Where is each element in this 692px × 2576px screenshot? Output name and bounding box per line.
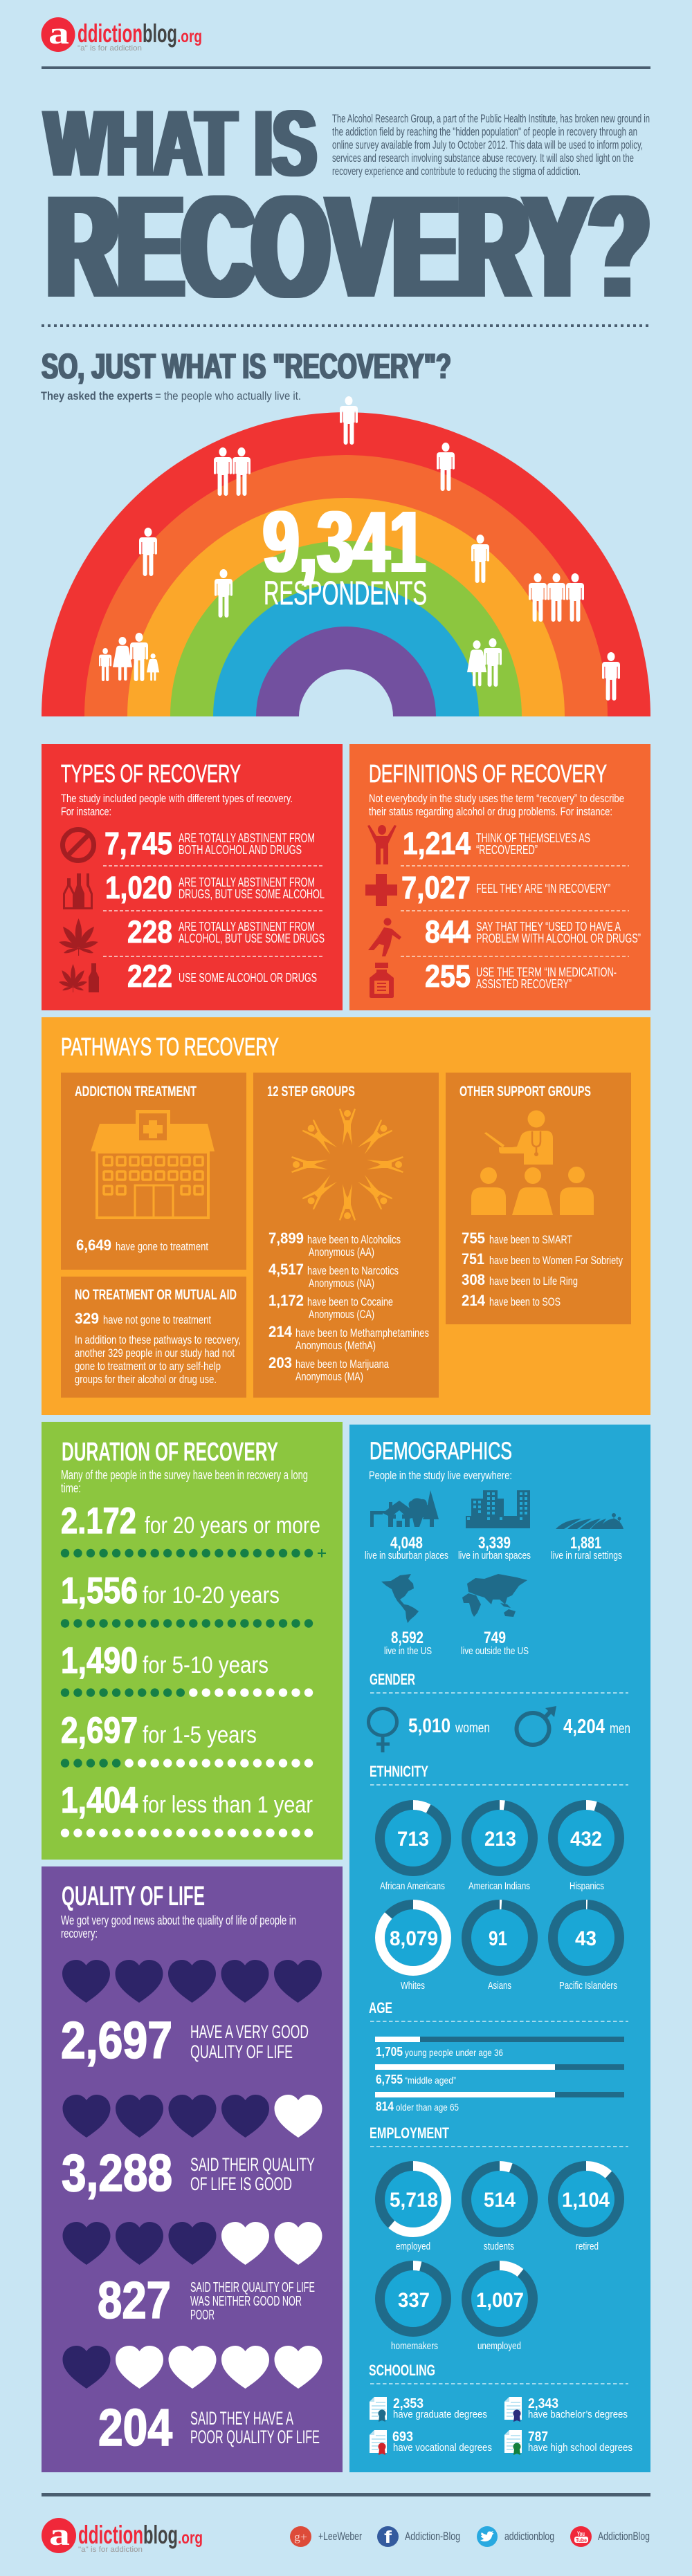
description: The study included people with different types of recovery. (61, 792, 293, 805)
stats: us vs outside: live in the US (384, 1645, 432, 1657)
hearts row 1 (62, 1960, 322, 2003)
donut: students: students (484, 2241, 514, 2252)
stats: residence types: 1,881 (570, 1534, 601, 1553)
social: youtube: AddictionBlog (598, 2530, 650, 2543)
donut: retired: retired (576, 2241, 599, 2252)
stat 844 (425, 914, 641, 949)
logo wordmark org: .org (177, 27, 202, 46)
vocational degrees: have vocational degrees (393, 2442, 492, 2454)
card heading: ADDICTION TREATMENT (75, 1084, 197, 1100)
heading: DURATION OF RECOVERY (62, 1438, 278, 1467)
logo wordmark: ddiction (78, 19, 143, 48)
rainbow band yellow (127, 498, 565, 716)
title line 1: WHAT IS (45, 91, 316, 196)
women stat: 5,010 (408, 1715, 450, 1737)
heading: DEMOGRAPHICS (370, 1438, 512, 1465)
donut: asians (466, 1905, 533, 1992)
social: facebook: f (384, 2528, 392, 2547)
hearts row 2 (62, 2095, 322, 2138)
list: 12 step stats: 7,899 (268, 1230, 304, 1247)
panel: definitions of recovery (349, 744, 650, 1010)
stat 222 (127, 958, 317, 994)
logo letter: a (49, 2517, 70, 2552)
heading: TYPES OF RECOVERY (61, 759, 241, 788)
stats: residence types: 3,339 (478, 1534, 511, 1553)
high school degrees: 787 (528, 2429, 548, 2445)
stat 2,697 (61, 2011, 309, 2069)
donut: whites (380, 1905, 446, 1992)
icon: medical cross (365, 874, 397, 906)
heading: PATHWAYS TO RECOVERY (61, 1032, 279, 1061)
rainbow chart (42, 396, 650, 716)
stats: residence types: live in suburban places (365, 1550, 448, 1562)
list: 12 step stats: Anonymous (CA) (309, 1308, 374, 1321)
logo wordmark blog: blog (143, 2521, 178, 2549)
social: facebook (377, 2526, 460, 2547)
stat 255: 255 (425, 958, 471, 994)
social: google plus: g+ (294, 2530, 307, 2543)
icon: city (466, 1490, 530, 1528)
stat 204 (98, 2398, 320, 2456)
list: other support stats: 308 (462, 1271, 485, 1288)
donut: whites: 8,079 (390, 1927, 438, 1950)
intro paragraph: recovery experience and contribute to reducing the stigma of addiction. (332, 165, 581, 178)
list: other support stats (462, 1230, 623, 1309)
donut: homemakers: 337 (398, 2289, 430, 2312)
donut: employed: employed (396, 2241, 430, 2252)
card: 12 step groups (253, 1073, 439, 1398)
hearts row 3 (62, 2222, 322, 2265)
rainbow band green (170, 541, 522, 716)
donut: american indians: American Indians (468, 1880, 530, 1892)
panel: demographics (349, 1425, 650, 2472)
list: 12 step stats: 214 (268, 1323, 293, 1340)
women stat (408, 1715, 490, 1737)
donut: unemployed: unemployed (477, 2340, 521, 2352)
social: youtube: Tube (576, 2537, 587, 2543)
stat 2,697: 2,697 (61, 2011, 172, 2069)
icon: rural fields (556, 1513, 623, 1529)
rainbow band red (42, 412, 650, 716)
icon: female symbol (368, 1708, 397, 1752)
stat 222: USE SOME ALCOHOL OR DRUGS (179, 971, 317, 985)
stat: 10-20 years: for 10-20 years (143, 1582, 280, 1609)
footer logo (42, 2517, 203, 2554)
donut: pacific islanders (553, 1905, 619, 1992)
stat: less than 1 year (61, 1780, 313, 1821)
donut: students (466, 2166, 533, 2252)
bar: under 36 (375, 2037, 624, 2059)
donut: retired: 1,104 (562, 2189, 610, 2212)
donut: unemployed (466, 2265, 533, 2352)
people icons (99, 396, 620, 701)
card heading: OTHER SUPPORT GROUPS (459, 1084, 591, 1100)
list: 12 step stats: Anonymous (MA) (295, 1370, 363, 1383)
stat 2,697: QUALITY OF LIFE (190, 2041, 293, 2062)
stat 222: 222 (127, 958, 172, 994)
panel: types of recovery (42, 744, 343, 1010)
bar: under 36: 1,705 (376, 2045, 403, 2059)
stat: gone to treatment: have gone to treatment (116, 1240, 208, 1253)
stat 827 (98, 2271, 315, 2329)
stat 228: ALCOHOL, BUT USE SOME DRUGS (179, 932, 325, 945)
list: 12 step stats: Anonymous (MethA) (295, 1339, 376, 1352)
stats: residence types: 4,048 (390, 1534, 423, 1553)
stat 255: ASSISTED RECOVERY” (476, 977, 572, 991)
list: 12 step stats: have been to Methamphetamines (295, 1326, 429, 1340)
stats: us vs outside: 8,592 (391, 1629, 424, 1647)
dots row 2 (61, 1619, 313, 1628)
heading: QUALITY OF LIFE (62, 1881, 205, 1911)
panel: pathways to recovery (42, 1017, 650, 1415)
respondents label: RESPONDENTS (264, 575, 427, 612)
icon: falling person (368, 918, 401, 956)
logo badge (42, 2518, 76, 2553)
card: other support groups (446, 1073, 631, 1324)
icon: medicine bottle (370, 963, 394, 998)
bar: older than 65 (375, 2092, 624, 2113)
donut: african americans (380, 1805, 446, 1892)
description: recovery: (61, 1927, 98, 1940)
logo wordmark: ddiction (78, 2521, 143, 2549)
section: schooling (369, 2362, 632, 2455)
stat: less than 1 year: 1,404 (61, 1780, 138, 1821)
vocational degrees: 693 (392, 2429, 413, 2445)
description: their status regarding alcohol or drug problems. For instance: (369, 805, 612, 818)
stat: 10-20 years (61, 1570, 280, 1611)
bar: middle aged: “middle aged” (405, 2075, 456, 2086)
bachelor degrees: 2,343 (528, 2396, 558, 2411)
stat: gone to treatment: 6,649 (76, 1236, 111, 1254)
stat 3,288 (62, 2144, 315, 2202)
description (369, 792, 624, 818)
stat 3,288: 3,288 (62, 2144, 172, 2202)
stat: not gone to treatment (75, 1310, 211, 1327)
paragraph: gone to treatment or to any self-help (75, 1360, 221, 1373)
list: other support stats: 751 (462, 1250, 484, 1268)
icon: doctor teaching group (471, 1111, 594, 1215)
stats: residence types: live in rural settings (551, 1550, 622, 1562)
paragraph: another 329 people in our study had not (75, 1346, 235, 1360)
stat 7,027: 7,027 (401, 870, 471, 905)
logo letter: a (48, 15, 69, 50)
men stat: 4,204 (563, 1716, 605, 1738)
donut: homemakers (380, 2265, 446, 2352)
stats: residence types (365, 1534, 622, 1562)
social: youtube: You (577, 2530, 585, 2537)
stat 7,745: 7,745 (104, 826, 172, 861)
donut: employed (380, 2166, 446, 2252)
donut: unemployed: 1,007 (476, 2289, 524, 2312)
stat 204: 204 (98, 2398, 172, 2456)
stat 844: SAY THAT THEY “USED TO HAVE A (476, 920, 621, 934)
stat 1,214 (403, 826, 590, 861)
stat 1,020: DRUGS, BUT USE SOME ALCOHOL (179, 887, 325, 901)
stat 1,214: THINK OF THEMSELVES AS (476, 831, 590, 845)
logo tagline: "a" is for addiction (78, 44, 142, 53)
description: For instance: (61, 805, 111, 818)
bachelor degrees: have bachelor’s degrees (528, 2409, 628, 2420)
stat: 10-20 years: 1,556 (61, 1570, 138, 1611)
bar: middle aged (375, 2064, 624, 2086)
list: 12 step stats: 1,172 (268, 1292, 304, 1309)
list: other support stats: have been to Women For Sobriety (489, 1254, 623, 1267)
donut: african americans: 713 (397, 1828, 429, 1851)
subheading: SCHOOLING (369, 2362, 435, 2379)
dots row 5 (61, 1828, 313, 1837)
description: People in the study live everywhere: (369, 1469, 512, 1482)
stat 844: 844 (425, 914, 471, 949)
stat 228: 228 (127, 914, 172, 949)
stat 3,288: SAID THEIR QUALITY (190, 2154, 315, 2175)
list: other support stats: 214 (462, 1292, 486, 1309)
donut: african americans: African Americans (380, 1880, 445, 1892)
list: 12 step stats: have been to Marijuana (295, 1358, 389, 1371)
social: twitter: addictionblog (504, 2530, 554, 2543)
paragraph: groups for their alcohol or drug use. (75, 1373, 217, 1386)
donut: hispanics: 432 (570, 1828, 602, 1851)
list: 12 step stats: have been to Cocaine (307, 1295, 393, 1308)
description: Many of the people in the survey have been in recovery a long (61, 1468, 308, 1482)
rainbow inner (299, 669, 393, 716)
bar: under 36: young people under age 36 (405, 2047, 503, 2058)
icon: cannabis leaf (59, 918, 98, 956)
list: other support stats: have been to SOS (489, 1295, 561, 1308)
bar: middle aged: 6,755 (376, 2073, 403, 2086)
donut: american indians (466, 1805, 533, 1892)
stat 204: POOR QUALITY OF LIFE (190, 2427, 320, 2447)
stat: 5-10 years: for 5-10 years (143, 1652, 268, 1678)
icon: suburb (370, 1490, 439, 1527)
stats: us vs outside: live outside the US (461, 1645, 529, 1657)
logo tagline: "a" is for addiction (78, 2546, 143, 2554)
paragraph: In addition to these pathways to recovery, (75, 1333, 241, 1346)
donut: pacific islanders: Pacific Islanders (559, 1980, 617, 1992)
list: 12 step stats: 203 (268, 1354, 292, 1371)
stat 204: SAID THEY HAVE A (190, 2408, 293, 2429)
footer rule (42, 2493, 650, 2496)
high school degrees (504, 2429, 632, 2455)
header logo (42, 15, 202, 53)
rainbow band orange (84, 455, 608, 716)
stat 1,020: ARE TOTALLY ABSTINENT FROM (179, 875, 315, 889)
icon: bottles (63, 873, 93, 909)
stat 1,020: 1,020 (105, 870, 172, 905)
intro paragraph (332, 112, 650, 178)
logo badge (42, 17, 75, 52)
icon: person arms raised (367, 825, 397, 864)
list: 12 step stats: have been to Alcoholics (307, 1233, 401, 1246)
card heading: NO TREATMENT OR MUTUAL AID (75, 1287, 237, 1303)
respondents number: 9,341 (263, 493, 426, 591)
dots row 4 (61, 1759, 313, 1768)
description (61, 792, 293, 818)
icon: hospital (91, 1110, 215, 1218)
stat 2,697: HAVE A VERY GOOD (190, 2021, 309, 2042)
icon: map of americas (381, 1574, 419, 1623)
list: 12 step stats: Anonymous (AA) (309, 1245, 374, 1259)
logo wordmark org: .org (178, 2528, 203, 2548)
donut: hispanics (553, 1805, 619, 1892)
donut: asians: Asians (488, 1980, 511, 1992)
stat 255 (425, 958, 617, 994)
stat: 5-10 years: 1,490 (61, 1640, 138, 1681)
stats: us vs outside: 749 (484, 1629, 506, 1647)
stat 827: SAID THEIR QUALITY OF LIFE (190, 2280, 315, 2295)
section: gender (368, 1671, 630, 1752)
description (61, 1914, 296, 1940)
bachelor degrees (504, 2396, 628, 2422)
stat: 1-5 years: 2,697 (61, 1710, 138, 1751)
social: youtube (570, 2526, 650, 2547)
icon: circle of people (291, 1109, 403, 1221)
subheading (41, 389, 301, 402)
subheading: GENDER (370, 1671, 415, 1688)
stat 7,745: ARE TOTALLY ABSTINENT FROM (179, 831, 315, 845)
dots row 1 (61, 1549, 326, 1557)
donut: pacific islanders: 43 (575, 1927, 597, 1950)
stat 827: WAS NEITHER GOOD NOR (190, 2294, 302, 2309)
donut: asians: 91 (489, 1927, 507, 1950)
stat: not gone to treatment: have not gone to treatment (103, 1313, 211, 1326)
donut: homemakers: homemakers (391, 2340, 438, 2352)
rainbow band blue (213, 584, 479, 716)
icon: map of eastern hemisphere (462, 1574, 527, 1617)
subheading: EMPLOYMENT (370, 2124, 449, 2142)
subheading: ETHNICITY (370, 1763, 428, 1780)
subheading: They asked the experts (41, 389, 153, 402)
stat 7,745: BOTH ALCOHOL AND DRUGS (179, 843, 302, 857)
stat 228 (127, 914, 325, 949)
graduate degrees: 2,353 (393, 2396, 424, 2411)
list: 12 step stats: 4,517 (268, 1261, 304, 1278)
vocational degrees (370, 2429, 492, 2455)
stat: 20 years or more: 2.172 (61, 1501, 136, 1541)
subheading: AGE (369, 1999, 392, 2017)
donut: hispanics: Hispanics (570, 1880, 604, 1892)
list: other support stats: have been to Life Ring (489, 1275, 578, 1288)
stat: less than 1 year: for less than 1 year (143, 1792, 313, 1818)
social: google plus (290, 2526, 362, 2547)
bar: older than 65: older than age 65 (396, 2102, 459, 2113)
icon: prohibited (62, 830, 94, 860)
bar: older than 65: 814 (376, 2100, 394, 2113)
panel: quality of life (42, 1866, 343, 2472)
stat: not gone to treatment: 329 (75, 1310, 99, 1327)
high school degrees: have high school degrees (528, 2442, 632, 2454)
rainbow band purple (256, 627, 436, 716)
donut: american indians: 213 (484, 1828, 516, 1851)
paragraph (75, 1333, 241, 1386)
stat 1,214: 1,214 (403, 826, 471, 861)
stat 3,288: OF LIFE IS GOOD (190, 2174, 292, 2194)
stat 7,027 (401, 870, 610, 905)
stat 827: POOR (190, 2308, 215, 2323)
title (45, 91, 649, 328)
stat 7,027: FEEL THEY ARE “IN RECOVERY” (476, 882, 610, 896)
card heading: 12 STEP GROUPS (267, 1084, 355, 1100)
donut: employed: 5,718 (390, 2189, 438, 2212)
social: twitter (477, 2526, 554, 2547)
men stat: men (610, 1721, 630, 1736)
card: no treatment or mutual aid (61, 1277, 246, 1398)
social: google plus: +LeeWeber (318, 2530, 362, 2543)
stats: residence types: live in urban spaces (458, 1550, 531, 1562)
description: time: (61, 1481, 81, 1495)
stat 827: 827 (98, 2271, 171, 2329)
graduate degrees (370, 2396, 487, 2422)
stat 7,745 (104, 826, 315, 861)
donut: retired (553, 2166, 619, 2252)
stat: 1-5 years: for 1-5 years (143, 1722, 257, 1748)
stat 228: ARE TOTALLY ABSTINENT FROM (179, 920, 315, 934)
header rule (42, 66, 650, 69)
stat: 5-10 years (61, 1640, 268, 1681)
section: ethnicity (370, 1763, 628, 1992)
hearts row 4 (62, 2346, 322, 2389)
list: 12 step stats (268, 1230, 429, 1383)
stat: 20 years or more: for 20 years or more (145, 1512, 320, 1539)
list: 12 step stats: Anonymous (NA) (309, 1277, 374, 1290)
social: facebook: Addiction-Blog (405, 2530, 460, 2543)
dots row 3 (61, 1688, 313, 1697)
section: age (369, 1999, 628, 2113)
stat 1,214: “RECOVERED” (476, 843, 538, 857)
list: 12 step stats: have been to Narcotics (307, 1264, 399, 1277)
stat 1,020 (105, 870, 325, 905)
stat: gone to treatment (76, 1236, 208, 1254)
heading: so just what is recovery: SO, JUST WHAT IS "RECOVERY"? (42, 346, 451, 386)
subheading: = the people who actually live it. (155, 389, 301, 402)
donut: whites: Whites (401, 1980, 425, 1992)
stat 255: USE THE TERM “IN MEDICATION- (476, 965, 617, 979)
graduate degrees: have graduate degrees (393, 2409, 487, 2420)
logo wordmark blog: blog (143, 19, 177, 48)
description: Not everybody in the study uses the term “recovery” to describe (369, 792, 624, 805)
stat: 1-5 years (61, 1710, 257, 1751)
stats: us vs outside (384, 1629, 529, 1657)
stat: 20 years or more (61, 1501, 320, 1541)
donut: students: 514 (484, 2189, 516, 2212)
list: other support stats: have been to SMART (489, 1233, 572, 1246)
panel: duration of recovery (42, 1422, 343, 1860)
section: employment (370, 2124, 628, 2352)
icon: male symbol (516, 1706, 556, 1745)
list: other support stats: 755 (462, 1230, 485, 1247)
card: addiction treatment (61, 1073, 246, 1270)
icon: leaf and bottle (59, 963, 99, 992)
description: We got very good news about the quality of life of people in (61, 1914, 296, 1927)
description (61, 1468, 308, 1495)
women stat: women (455, 1721, 490, 1736)
